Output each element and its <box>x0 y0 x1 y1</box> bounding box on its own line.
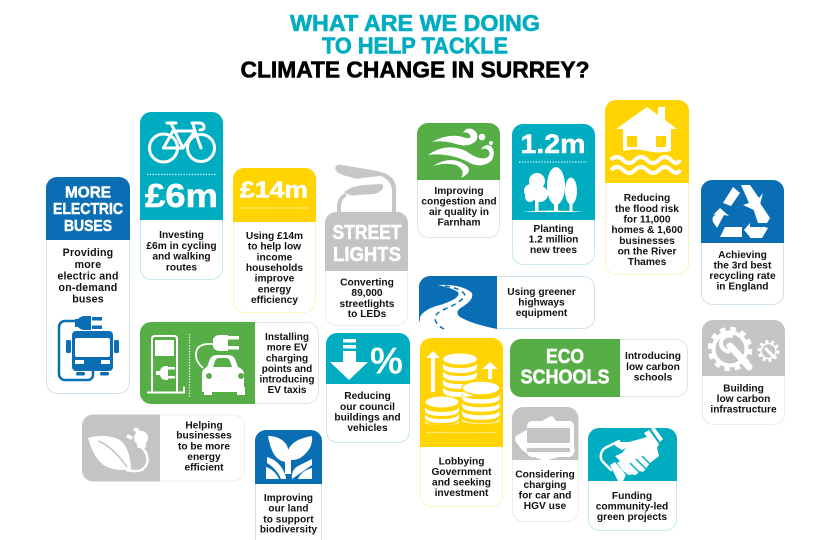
panel: low carbon infrastructure <box>702 320 785 424</box>
text: air quality description: Improving <box>434 186 484 197</box>
icon: plant and fields <box>266 436 312 479</box>
text: flood description: on the River <box>618 246 676 258</box>
panel: improving land <box>255 430 322 540</box>
text: EV description: more EV <box>267 342 308 354</box>
text: highways description: equipment <box>516 308 568 319</box>
text: EV description: EV taxis <box>268 385 307 396</box>
text: households description: energy <box>258 284 292 296</box>
text: trees description: Planting <box>533 224 574 235</box>
text: households description: income <box>257 252 293 264</box>
text: recycling description: Achieving <box>718 250 767 261</box>
icon: wind swirls <box>428 128 494 178</box>
text: cycling description: routes <box>166 262 197 274</box>
text: flood description: for 11,000 <box>623 214 671 226</box>
icon: winding road <box>420 285 497 329</box>
text: community description: community-led <box>596 502 668 512</box>
text: eco schools description: Introducing <box>625 351 681 362</box>
text: trees description: new trees <box>530 245 577 256</box>
panel: low income households <box>233 168 316 312</box>
panel: helping businesses <box>82 414 244 482</box>
icon: flooded house <box>611 107 680 173</box>
text: council description: our council <box>340 402 395 413</box>
text: trees description: 1.2 million <box>529 234 578 246</box>
text: community description: Funding <box>612 491 652 502</box>
text: households description: improve <box>255 274 295 284</box>
heading: eco schools: SCHOOLS <box>520 366 610 388</box>
text: businesses description: efficient <box>184 462 224 474</box>
icon: bicycle <box>150 123 214 162</box>
text: air quality description: congestion and <box>421 196 497 208</box>
heading: £14m: £14m <box>240 176 308 202</box>
heading: street lights: LIGHTS <box>333 243 401 266</box>
panel: eco schools <box>510 339 688 397</box>
icon: street lamps <box>335 165 396 213</box>
panel: more electric buses <box>46 177 130 394</box>
text: charging description: Considering <box>515 470 575 480</box>
text: charging description: for car and <box>519 490 571 502</box>
icon: electric car with plug <box>196 335 245 395</box>
panel: recycling rate <box>701 180 784 304</box>
text: EV description: points and <box>262 364 312 375</box>
text: EV description: introducing <box>260 374 314 386</box>
text: EV description: charging <box>266 354 308 364</box>
text: households description: households <box>246 263 303 274</box>
text: land description: to support <box>263 514 314 526</box>
text: households description: efficiency <box>251 295 298 306</box>
panel: car and HGV charging <box>512 407 578 522</box>
panel: EV charging <box>140 322 318 404</box>
text: highways description: Using greener <box>507 287 576 298</box>
panel: street lights <box>325 165 408 326</box>
title: WHAT ARE WE DOING <box>290 10 540 36</box>
text: households description: Using £14m <box>246 231 303 242</box>
text: flood description: Thames <box>628 257 667 268</box>
text: flood description: homes & 1,600 <box>611 225 683 236</box>
text: recycling description: recycling rate <box>709 271 776 282</box>
heading: more electric buses <box>53 184 123 235</box>
title: TO HELP TACKLE <box>322 32 508 58</box>
text: street lights description: streetlights <box>340 299 395 310</box>
text: eco schools description: low carbon <box>626 362 680 373</box>
text: infrastructure description: infrastructure <box>710 404 777 416</box>
text: businesses description: energy <box>187 452 221 463</box>
heading: more electric buses: BUSES <box>64 218 112 235</box>
text: land description: Improving <box>264 493 313 504</box>
text: land description: biodiversity <box>260 524 318 536</box>
text: lobbying description: and seeking <box>432 478 491 488</box>
panel: cycling and walking <box>140 112 223 280</box>
text: cycling description: and walking <box>152 252 211 262</box>
panel: congestion and air quality <box>417 123 500 238</box>
text: buses description: buses <box>72 294 104 306</box>
text: street lights description: Converting <box>340 278 394 288</box>
text: charging description: charging <box>523 480 567 491</box>
panel: community green projects <box>588 427 677 530</box>
text: households description: to help low <box>248 242 301 252</box>
text: infrastructure description: Building <box>723 384 764 394</box>
icon: charging point <box>147 336 184 392</box>
text: charging description: HGV use <box>524 501 567 512</box>
text: flood description: Reducing <box>624 193 670 204</box>
icon: handshake <box>601 427 663 481</box>
text: lobbying description: Government <box>431 467 492 478</box>
text: flood description: the flood risk <box>615 204 679 215</box>
title <box>240 10 590 82</box>
text: air quality description: air quality in <box>429 207 489 218</box>
text: cycling description: Investing <box>159 230 204 241</box>
text: street lights description: to LEDs <box>348 309 387 320</box>
text: eco schools description: schools <box>634 372 673 384</box>
text: businesses description: Helping <box>185 420 223 432</box>
text: council description: buildings and <box>334 412 401 424</box>
text: lobbying description: investment <box>435 488 489 499</box>
text: recycling description: the 3rd best <box>714 260 772 272</box>
heading: more electric buses: MORE <box>65 184 111 202</box>
panel: lobbying government <box>420 338 503 506</box>
heading: 1.2m: 1.2m <box>520 129 586 159</box>
heading: eco schools: ECO <box>546 345 584 368</box>
text: highways description: highways <box>518 298 565 308</box>
text: street lights description: 89,000 <box>351 288 383 299</box>
heading: eco schools <box>520 345 610 388</box>
text: cycling description: £6m in cycling <box>146 241 217 252</box>
text: air quality description: Farnham <box>437 218 481 228</box>
text: council description: Reducing <box>344 391 391 402</box>
text: lobbying description: Lobbying <box>439 456 484 468</box>
heading: more electric buses: ELECTRIC <box>53 201 123 218</box>
title: CLIMATE CHANGE IN SURREY? <box>240 56 590 82</box>
text: businesses description: to be more <box>178 442 230 452</box>
heading: street lights <box>332 221 402 266</box>
heading: £6m: £6m <box>145 177 218 214</box>
icon: gears and spanners <box>710 329 778 369</box>
panel: greener highways <box>419 276 594 329</box>
text: flood description: businesses <box>619 236 675 247</box>
text: buses description: Providing <box>63 247 113 259</box>
text: infrastructure description: low carbon <box>717 394 770 405</box>
icon: recycling arrows <box>712 185 770 238</box>
icon: coins and arrows <box>425 351 500 425</box>
text: buses description: on-demand <box>59 282 117 294</box>
text: community description: green projects <box>597 512 667 523</box>
panel: planting trees <box>512 124 595 264</box>
text: businesses description: businesses <box>176 430 232 442</box>
text: buses description: electric and <box>57 270 119 282</box>
icon: electric bus with plug <box>59 316 119 380</box>
heading: street lights: STREET <box>332 221 402 244</box>
text: land description: our land <box>268 504 309 514</box>
icon: payment cards <box>515 416 575 460</box>
panel: flood risk <box>605 100 689 274</box>
icon: down arrow with percent: % <box>370 340 403 382</box>
panel: reducing council buildings <box>326 333 410 442</box>
text: buses description: more <box>75 259 101 271</box>
icon: leaf and plug <box>88 427 148 471</box>
text: EV description: Installing <box>265 332 309 343</box>
icon: trees <box>522 167 584 212</box>
text: council description: vehicles <box>347 423 388 434</box>
text: recycling description: in England <box>716 282 769 292</box>
